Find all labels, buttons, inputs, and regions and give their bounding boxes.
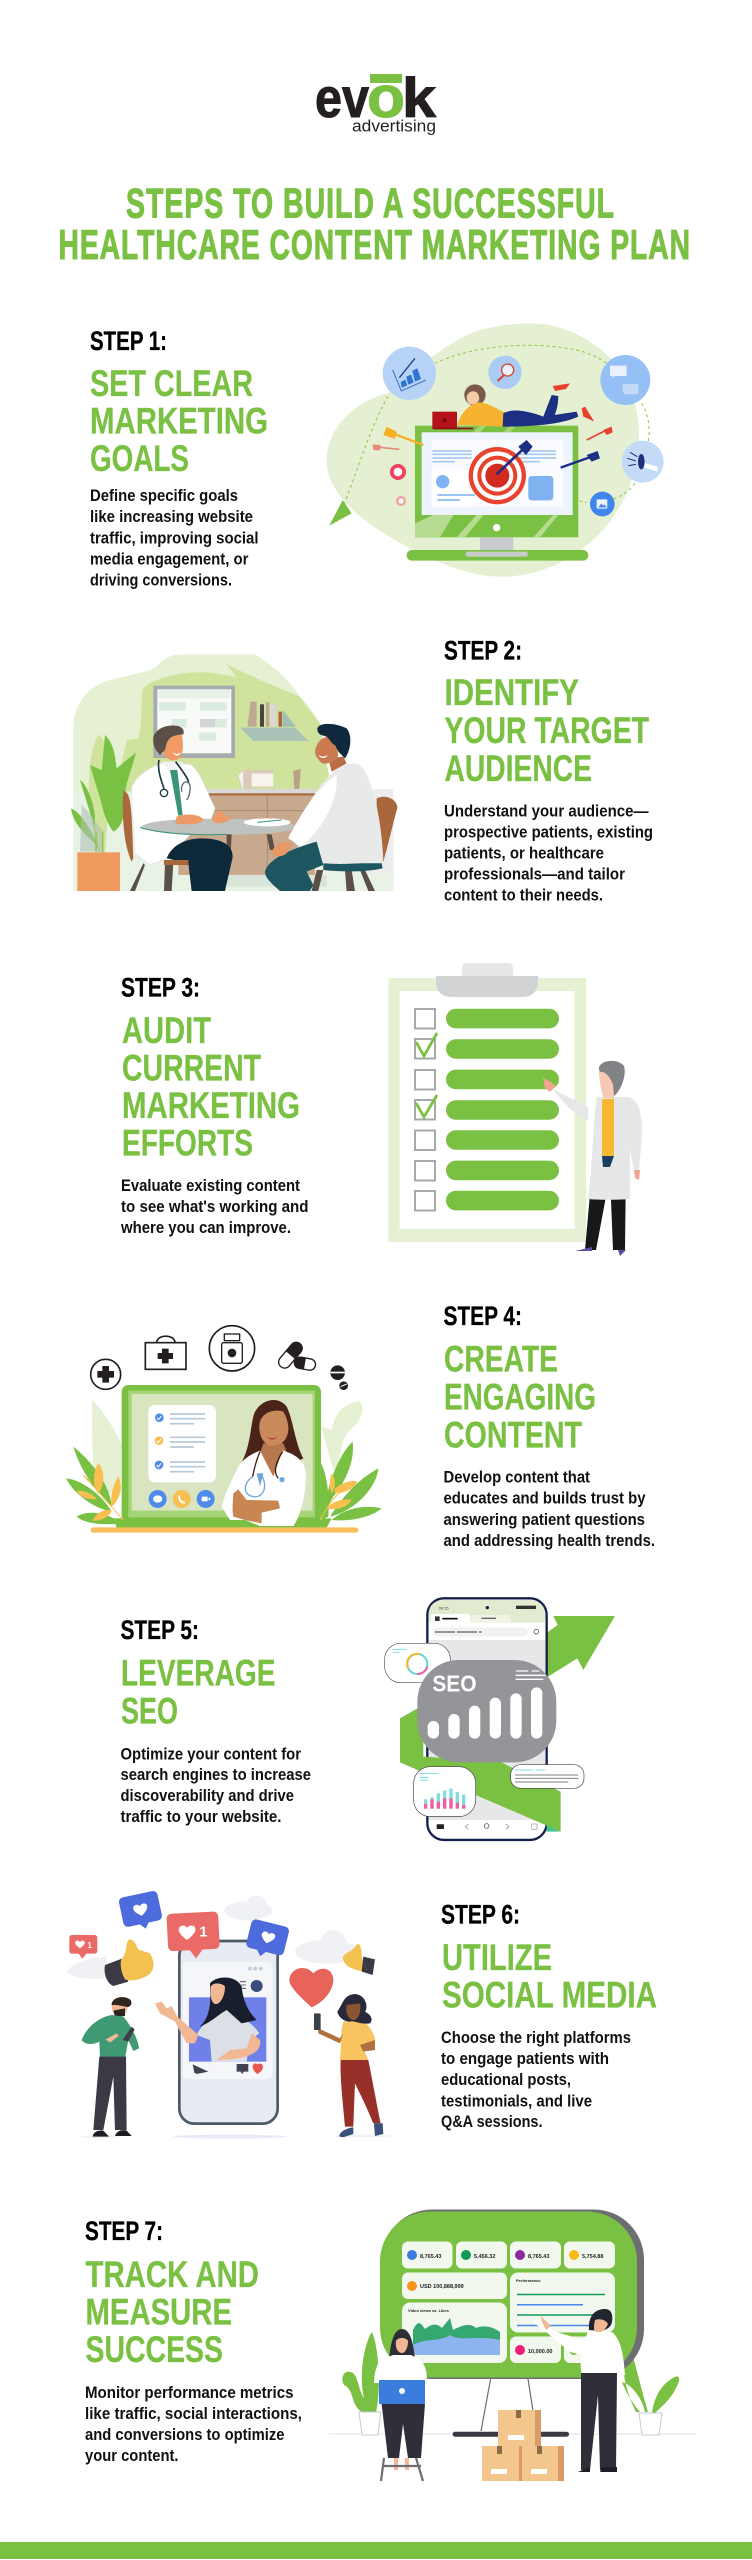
illustration: seo phone with growth arrow <box>385 1598 615 1840</box>
step 7 heading: SUCCESS <box>86 2329 223 2370</box>
step 5 heading: LEVERAGE <box>121 1652 276 1694</box>
step 4 body text: answering patient questions <box>444 1511 645 1529</box>
step 1 body text: like increasing website <box>90 508 253 526</box>
illustration: monitor with target <box>327 323 664 577</box>
step 4 body text: and addressing health trends. <box>444 1532 655 1550</box>
footer bar <box>0 2542 752 2559</box>
panel: step 5 leverage seo <box>120 1598 615 1840</box>
panel: step 3 audit current marketing efforts <box>120 963 642 1256</box>
illustration: analytics dashboard with presenters: Video views vs. Likes <box>408 2308 450 2313</box>
illustration: analytics dashboard with presenters: 8,765.43 <box>528 2254 549 2260</box>
step 2 body text: professionals—and tailor <box>444 866 626 884</box>
step 2 heading: AUDIENCE <box>444 748 592 789</box>
step 3 body text: where you can improve. <box>120 1219 291 1237</box>
step 7 body text: and conversions to optimize <box>85 2426 284 2444</box>
step 6 body text: Choose the right platforms <box>441 2029 631 2047</box>
step 3 heading <box>122 1010 300 1164</box>
illustration: social media phone with people: 1 <box>199 1925 207 1941</box>
panel: step 4 create engaging content <box>66 1301 655 1550</box>
step 6 body text <box>441 2029 631 2131</box>
illustration: analytics dashboard with presenters: 8,765.43 <box>420 2254 441 2260</box>
step 7 heading: MEASURE <box>86 2292 232 2332</box>
step 2 heading: YOUR TARGET <box>444 710 649 751</box>
step 1 body text <box>90 487 258 590</box>
illustration: analytics dashboard with presenters: 5,456.32 <box>474 2254 495 2260</box>
step 1 heading <box>90 363 268 479</box>
step 5 label: STEP 5: <box>120 1615 199 1645</box>
step 3 label: STEP 3: <box>121 972 200 1002</box>
step 2 body text: patients, or healthcare <box>444 845 604 863</box>
step 6 heading: SOCIAL MEDIA <box>442 1974 657 2016</box>
step 1 label: STEP 1: <box>90 326 167 356</box>
logo: evok advertising <box>315 65 437 136</box>
panel: step 1 set clear marketing goals <box>90 323 664 590</box>
step 4 label: STEP 4: <box>444 1301 522 1331</box>
step 5 heading: SEO <box>121 1690 178 1732</box>
illustration: seo phone with growth arrow: 08:15 <box>439 1605 449 1610</box>
illustration: analytics dashboard with presenters <box>329 2210 696 2481</box>
step 1 heading: MARKETING <box>90 400 268 442</box>
illustration: analytics dashboard with presenters: 10,000.00 <box>528 2349 552 2355</box>
step 6 heading <box>442 1937 657 2016</box>
step 1 body text: driving conversions. <box>90 572 232 590</box>
step 4 heading: CONTENT <box>444 1414 582 1456</box>
panel: step 6 utilize social media <box>67 1890 657 2139</box>
step 1 body text: Define specific goals <box>90 487 238 505</box>
step 1 body text: traffic, improving social <box>90 530 258 548</box>
illustration: doctor and patient <box>71 654 397 891</box>
step 7 body text: your content. <box>85 2447 178 2465</box>
step 1 heading: SET CLEAR <box>90 363 253 404</box>
illustration: social media phone with people: 1 <box>87 1941 92 1950</box>
step 5 body text: traffic to your website. <box>120 1808 282 1826</box>
logo: evok advertising: o <box>367 65 405 130</box>
step 3 body text: to see what's working and <box>121 1198 308 1216</box>
step 6 body text: to engage patients with <box>441 2050 609 2068</box>
step 3 heading: EFFORTS <box>122 1122 253 1164</box>
illustration: analytics dashboard with presenters: USD 100,888,999 <box>420 2284 464 2290</box>
step 2 label: STEP 2: <box>444 636 522 666</box>
step 7 body text <box>85 2384 302 2465</box>
illustration: seo phone with growth arrow: SEO <box>432 1671 477 1697</box>
logo: evok advertising: ev <box>315 66 369 129</box>
step 5 body text <box>120 1746 311 1826</box>
logo: evok advertising: advertising <box>352 116 436 136</box>
step 3 heading: CURRENT <box>122 1048 261 1088</box>
panel: step 2 identify your target audience <box>71 636 653 904</box>
logo: evok advertising: k <box>402 66 437 129</box>
illustration: checklist clipboard with doctor <box>388 963 642 1256</box>
step 7 heading: TRACK AND <box>86 2254 259 2295</box>
step 4 body text: educates and builds trust by <box>444 1490 646 1508</box>
step 5 body text: search engines to increase <box>120 1766 311 1784</box>
step 6 body text: Q&A sessions. <box>441 2113 542 2131</box>
illustration: telehealth doctor on laptop <box>66 1326 382 1533</box>
title <box>58 180 691 268</box>
illustration: analytics dashboard with presenters: 5,754.88 <box>582 2254 603 2260</box>
step 3 body text <box>120 1177 308 1237</box>
step 1 body text: media engagement, or <box>90 550 249 568</box>
step 2 body text: content to their needs. <box>444 886 603 904</box>
step 4 body text <box>444 1468 655 1550</box>
step 5 body text: discoverability and drive <box>120 1787 294 1805</box>
step 4 body text: Develop content that <box>444 1468 590 1486</box>
step 6 body text: testimonials, and live <box>441 2092 592 2110</box>
step 7 heading <box>86 2254 259 2370</box>
step 3 body text: Evaluate existing content <box>121 1177 300 1195</box>
step 5 heading <box>121 1652 276 1732</box>
step 4 heading <box>444 1338 596 1456</box>
step 6 label: STEP 6: <box>441 1900 520 1930</box>
step 3 heading: AUDIT <box>122 1010 211 1051</box>
panel: step 7 track and measure success <box>85 2210 696 2481</box>
illustration: analytics dashboard with presenters: Performance <box>516 2278 541 2283</box>
step 3 heading: MARKETING <box>122 1085 300 1126</box>
step 2 heading: IDENTIFY <box>444 672 579 713</box>
step 4 heading: CREATE <box>444 1338 558 1380</box>
step 6 body text: educational posts, <box>441 2071 571 2089</box>
step 5 body text: Optimize your content for <box>120 1746 302 1764</box>
step 2 body text: prospective patients, existing <box>444 824 653 842</box>
illustration: social media phone with people <box>67 1890 392 2139</box>
step 6 heading: UTILIZE <box>442 1937 552 1978</box>
step 2 body text <box>444 803 653 904</box>
step 1 heading: GOALS <box>90 438 189 479</box>
step 7 label: STEP 7: <box>85 2216 163 2246</box>
step 2 heading <box>444 672 649 789</box>
step 2 body text: Understand your audience— <box>444 803 649 821</box>
step 4 heading: ENGAGING <box>444 1376 596 1418</box>
step 7 body text: like traffic, social interactions, <box>85 2405 302 2423</box>
step 7 body text: Monitor performance metrics <box>85 2384 294 2402</box>
